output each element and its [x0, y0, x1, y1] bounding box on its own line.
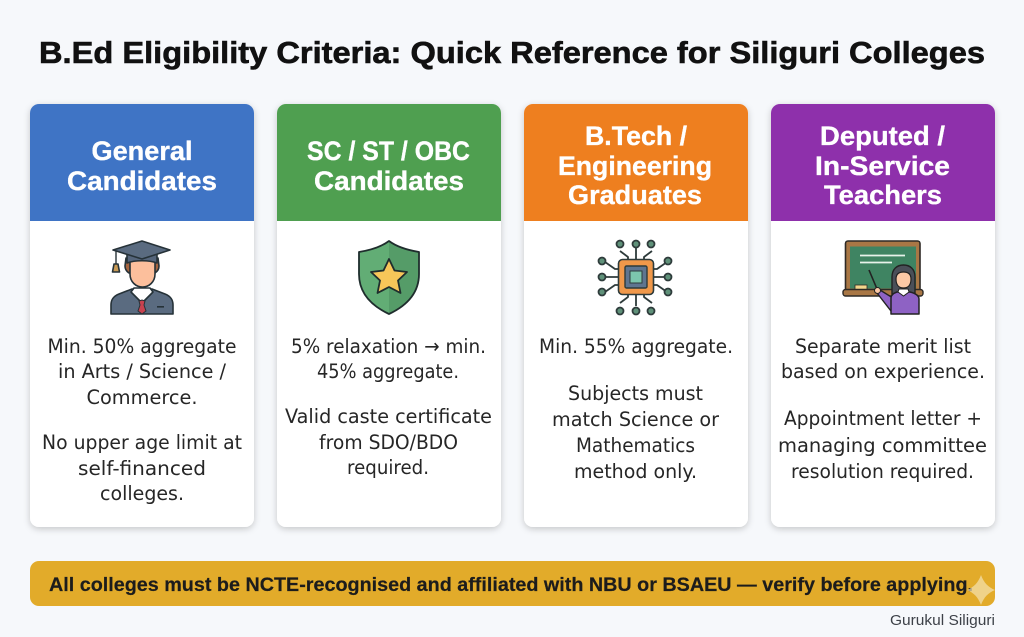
body text: No upper age limit at [42, 431, 242, 454]
body text: Separate merit list [795, 335, 971, 358]
body text: managing committee [778, 434, 987, 457]
body text: 5% relaxation → min. [291, 335, 486, 358]
body text: colleges. [100, 482, 184, 505]
icon: graduate [111, 241, 173, 314]
panel header: General Candidates [30, 104, 254, 221]
panel: B.Tech / Engineering Graduates [524, 104, 748, 527]
body text: 45% aggregate. [317, 360, 459, 383]
body text: from SDO/BDO [319, 431, 458, 454]
panel header: B.Tech / Engineering Graduates: Graduates [568, 180, 702, 210]
panel header: B.Tech / Engineering Graduates: B.Tech / [585, 121, 688, 151]
body text: self-financed [78, 457, 206, 480]
body text: Commerce. [86, 386, 198, 409]
credit: Gurukul Siliguri [890, 612, 995, 629]
icon: shield with star [359, 241, 419, 314]
panel: General Candidates [30, 104, 254, 527]
icon: microchip [598, 240, 672, 314]
icon: teacher at chalkboard [843, 241, 923, 314]
panel header: General Candidates: Candidates [67, 166, 217, 196]
body text [539, 335, 733, 483]
panel: SC / ST / OBC Candidates [277, 104, 501, 527]
body text: Valid caste certificate [285, 405, 492, 428]
panel header: B.Tech / Engineering Graduates: Engineering [558, 151, 712, 181]
icon: sparkle watermark [967, 575, 995, 605]
panel header: Deputed / In-Service Teachers: Teachers [824, 180, 942, 210]
panel header: B.Tech / Engineering Graduates [524, 104, 748, 221]
callout banner: All colleges must be NCTE-recognised and affiliated with NBU or BSAEU — verify before applying. [49, 575, 973, 596]
body text: Appointment letter + [784, 407, 982, 430]
body text: resolution required. [791, 460, 974, 483]
body text [778, 335, 987, 483]
panel: Deputed / In-Service Teachers [771, 104, 995, 527]
title: B.Ed Eligibility Criteria: Quick Reference for Siliguri Colleges [39, 36, 985, 70]
body text: required. [347, 456, 429, 479]
body text: method only. [574, 460, 697, 483]
panel header: Deputed / In-Service Teachers: Deputed / [820, 121, 946, 151]
body text: in Arts / Science / [58, 360, 226, 383]
callout banner [30, 561, 995, 606]
panel header: SC / ST / OBC Candidates: Candidates [314, 166, 464, 196]
body text: Min. 50% aggregate [48, 335, 236, 358]
panel header: Deputed / In-Service Teachers: In-Service [815, 151, 950, 181]
body text: Subjects must [568, 382, 703, 405]
body text: Mathematics [576, 434, 695, 457]
body text [42, 335, 242, 505]
panel header: SC / ST / OBC Candidates [277, 104, 501, 221]
body text: match Science or [552, 408, 720, 431]
body text [285, 335, 492, 479]
body text: Min. 55% aggregate. [539, 335, 733, 358]
panel header: General Candidates: General [92, 136, 192, 166]
panel header: SC / ST / OBC Candidates: SC / ST / OBC [307, 136, 470, 166]
body text: based on experience. [781, 360, 985, 383]
panel header: Deputed / In-Service Teachers [771, 104, 995, 221]
